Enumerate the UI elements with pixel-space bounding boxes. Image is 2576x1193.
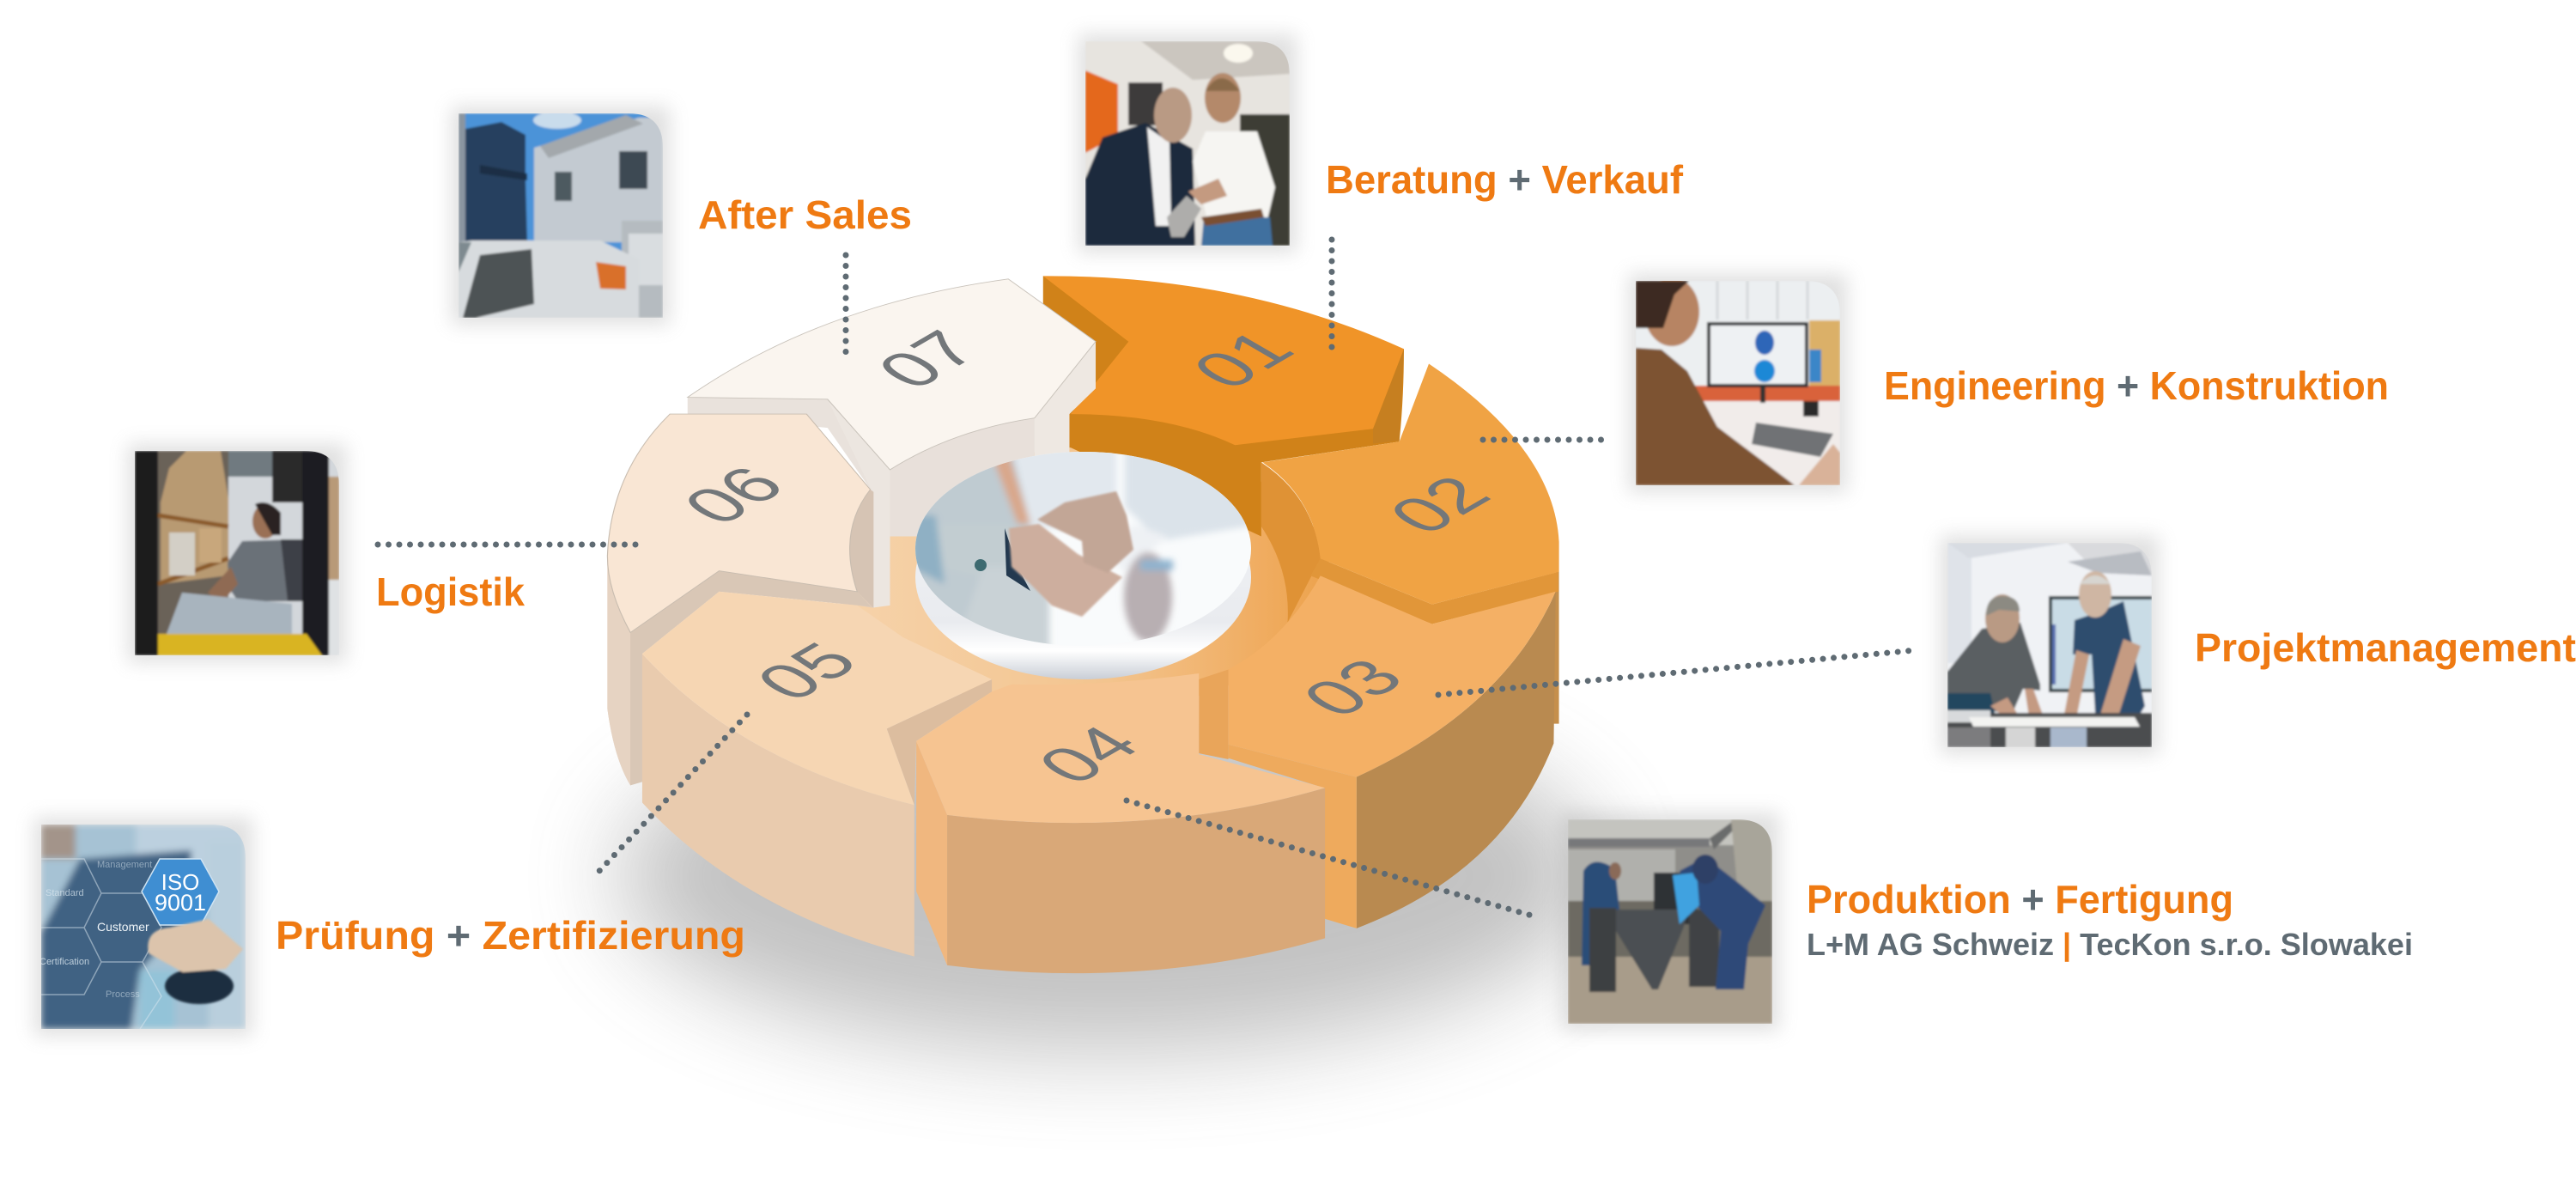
label: Produktion + Fertigung: Produktion + Fertigung [1807,877,2233,922]
label: Beratung + Verkauf: Beratung + Verkauf [1326,157,1684,202]
number 05: 05 [739,632,874,711]
photo: Beratung [1078,34,1297,253]
segment 02 [1261,364,1559,724]
photo: ISO 9001: Management [97,860,152,870]
photo: ISO 9001: ISO [161,869,199,895]
number 06: 06 [666,456,801,535]
segment 01 [1043,276,1404,536]
photo: ISO 9001: Customer [97,920,149,934]
hub disc [910,447,1262,679]
handshake photo [915,452,1251,644]
number 03: 03 [1285,648,1420,727]
label: Prüfung + Zertifizierung: Prüfung + Zertifizierung [276,913,745,958]
label: Logistik: Logistik [376,569,525,614]
sublabel: locations: L+M AG Schweiz | TecKon s.r.o. Slowakei [1807,927,2413,963]
leader lines [378,240,1916,916]
photo: ISO 9001: 9001 [155,890,206,916]
number 04: 04 [1021,715,1156,794]
number 07: 07 [860,320,995,399]
photo: ISO 9001: Certification [39,957,89,967]
number 02: 02 [1372,466,1507,545]
label: After Sales: After Sales [698,192,912,237]
segment 03 [1199,575,1556,928]
photo: Logistik [128,444,346,662]
label: Engineering + Konstruktion: Engineering + Konstruktion [1884,363,2389,408]
photo: ISO 9001: Standard [46,888,84,898]
label: Projektmanagement: Projektmanagement [2195,625,2576,670]
segment 07 [688,279,1096,608]
photo: Engineering [1629,274,1847,492]
wheel drop shadow [618,700,1597,1052]
segment 06 [607,414,873,785]
number 01: 01 [1176,320,1310,399]
photo: Produktion [1561,813,1779,1031]
photo: Projektmanagement [1941,536,2159,754]
process wheel [607,276,1559,973]
hub floor [837,441,1330,711]
photo: ISO 9001: Process [106,989,140,1000]
segment 05 [642,592,992,957]
photo: After Sales [452,107,670,325]
photo: ISO 9001 [34,818,252,1036]
segment 04 [916,673,1325,973]
